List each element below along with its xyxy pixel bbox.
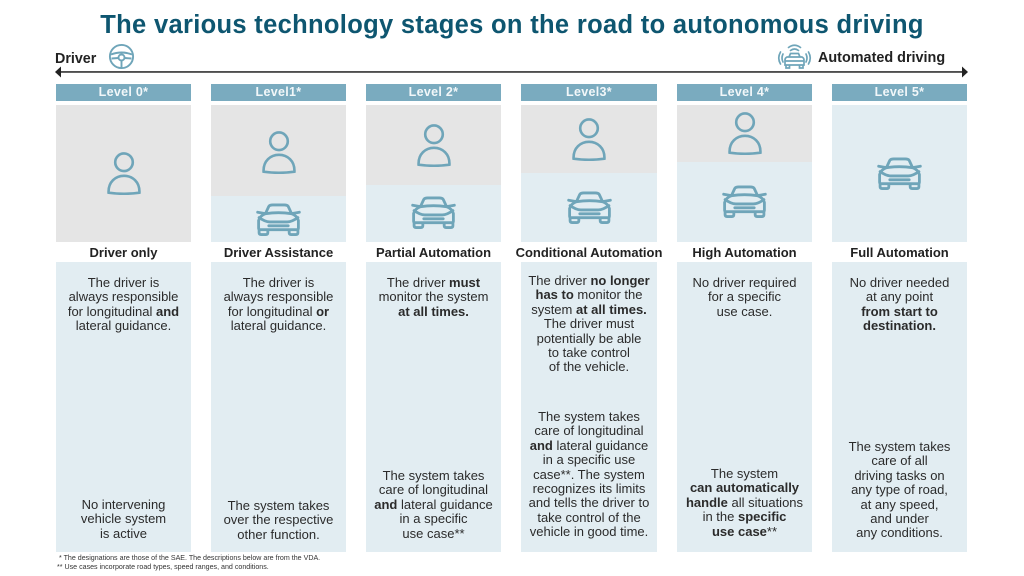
system role: use case** [402,526,465,541]
level 5 header [832,84,967,101]
level 5 header: Level 5* [875,85,924,99]
level 2 name: Partial Automation [376,245,491,260]
system role [848,439,950,540]
system role [81,497,166,541]
icon: person [107,152,141,195]
system role: in a specific use [543,452,635,467]
level 0 header: Level 0* [99,85,148,99]
footnotes: ** Use cases incorporate road types, speed ranges, and conditions. [57,563,269,571]
level 4 name: High Automation [692,245,797,260]
driver role [850,275,949,333]
driver role: to take control [548,345,630,360]
driver share [677,105,812,162]
driver role: for a specific [708,289,781,304]
system role: care of longitudinal [534,423,644,438]
system role [686,466,803,539]
driver share [366,105,501,185]
panel: level 3 description [521,262,657,552]
system role [529,409,649,539]
driver role: for longitudinal and [68,304,179,319]
panel: level 1 description [211,262,346,552]
driver role: system at all times. [531,302,647,317]
level 3 name: Conditional Automation [516,245,662,260]
system role: take control of the [537,510,641,525]
system role: in the specific [703,509,786,524]
footnotes [57,554,320,571]
system role: The system takes [538,409,640,424]
panel: level 5 description [832,262,967,552]
system role: care of longitudinal [379,482,488,497]
driver role: for longitudinal or [228,304,329,319]
system role: use case** [712,524,777,539]
panel: level 1 image [211,105,346,242]
level 4 header: Level 4* [720,85,769,99]
icon: steering wheel [108,44,134,69]
panel: level 4 image [677,105,812,242]
system role: vehicle system [81,511,166,526]
driver role: The driver no longer [528,273,650,288]
icon: person [262,131,296,174]
system role: handle all situations [686,495,803,510]
system role: driving tasks on [854,468,945,483]
system role: any type of road, [851,482,948,497]
driver role: monitor the system [379,289,488,304]
icon: car [567,192,612,224]
footnotes: * The designations are those of the SAE. The descriptions below are from the VDA. [59,554,320,562]
driver role: use case. [717,304,772,319]
driver role: The driver is [88,275,159,290]
system role: any conditions. [856,525,943,540]
driver role: lateral guidance. [76,318,171,333]
icon: person [417,124,451,167]
panel: level 0 image [56,105,191,242]
double-headed arrow [55,66,968,78]
level 3 header [521,84,657,101]
system role: and lateral guidance [374,497,493,512]
system role: over the respective [224,512,333,527]
system role: can automatically [690,480,799,495]
level 4 header [677,84,812,101]
driver role: always responsible [69,289,178,304]
system role: care of all [871,453,928,468]
driver role: lateral guidance. [231,318,326,333]
panel: level 2 image [366,105,501,242]
system role: in a specific [400,511,467,526]
level 1 header: Level1* [256,85,301,99]
system role: The system takes [849,439,950,454]
level 0 header [56,84,191,101]
system role: The system takes [383,468,484,483]
level 1 header [211,84,346,101]
system role: case**. The system [533,467,645,482]
system role: recognizes its limits [533,481,645,496]
panel: level 5 image [832,105,967,242]
level 5 name: Full Automation [850,245,949,260]
driver share [211,105,346,196]
level 2 header: Level 2* [409,85,458,99]
system role: at any speed, [860,497,939,512]
driver role: always responsible [224,289,333,304]
system role: The system [711,466,778,481]
icon: car [722,186,767,218]
driver role: No driver required [692,275,797,290]
level 3 header: Level3* [566,85,612,99]
title: The various technology stages on the road to autonomous driving [100,11,924,39]
system role [224,498,333,542]
panel: level 4 description [677,262,812,552]
system role: vehicle in good time. [530,524,648,539]
label: automated driving: Automated driving [818,50,945,66]
driver role: The driver must [544,316,634,331]
system role: No intervening [82,497,165,512]
driver role: The driver must [387,275,480,290]
driver share [521,105,657,173]
panel: level 2 description [366,262,501,552]
level 1 name: Driver Assistance [224,245,333,260]
icon: connected car [778,44,812,69]
driver role [692,275,797,319]
system role: other function. [237,527,320,542]
driver role: at all times. [398,304,469,319]
driver role [528,273,650,374]
system role: and tells the driver to [529,495,649,510]
system role: and lateral guidance [530,438,648,453]
driver role: from start to [861,304,938,319]
panel: level 3 image [521,105,657,242]
driver role: potentially be able [537,331,641,346]
icon: car [877,158,922,190]
driver role: The driver is [243,275,314,290]
driver role: of the vehicle. [549,359,629,374]
driver role [379,275,488,319]
level 2 header [366,84,501,101]
system role: and under [870,511,929,526]
system role: is active [100,526,147,541]
label: driver: Driver [55,51,96,67]
icon: person [728,112,762,155]
panel: level 0 description [56,262,191,552]
driver role: at any point [866,289,933,304]
system role: The system takes [228,498,329,513]
level 0 name: Driver only [90,245,157,260]
driver role: has to monitor the [536,287,642,302]
icon: car [411,196,456,229]
icon: car [256,204,301,236]
driver role: No driver needed [850,275,949,290]
driver role [68,275,179,333]
driver role [224,275,333,333]
system role [374,468,493,541]
icon: person [572,118,606,161]
driver role: destination. [863,318,936,333]
